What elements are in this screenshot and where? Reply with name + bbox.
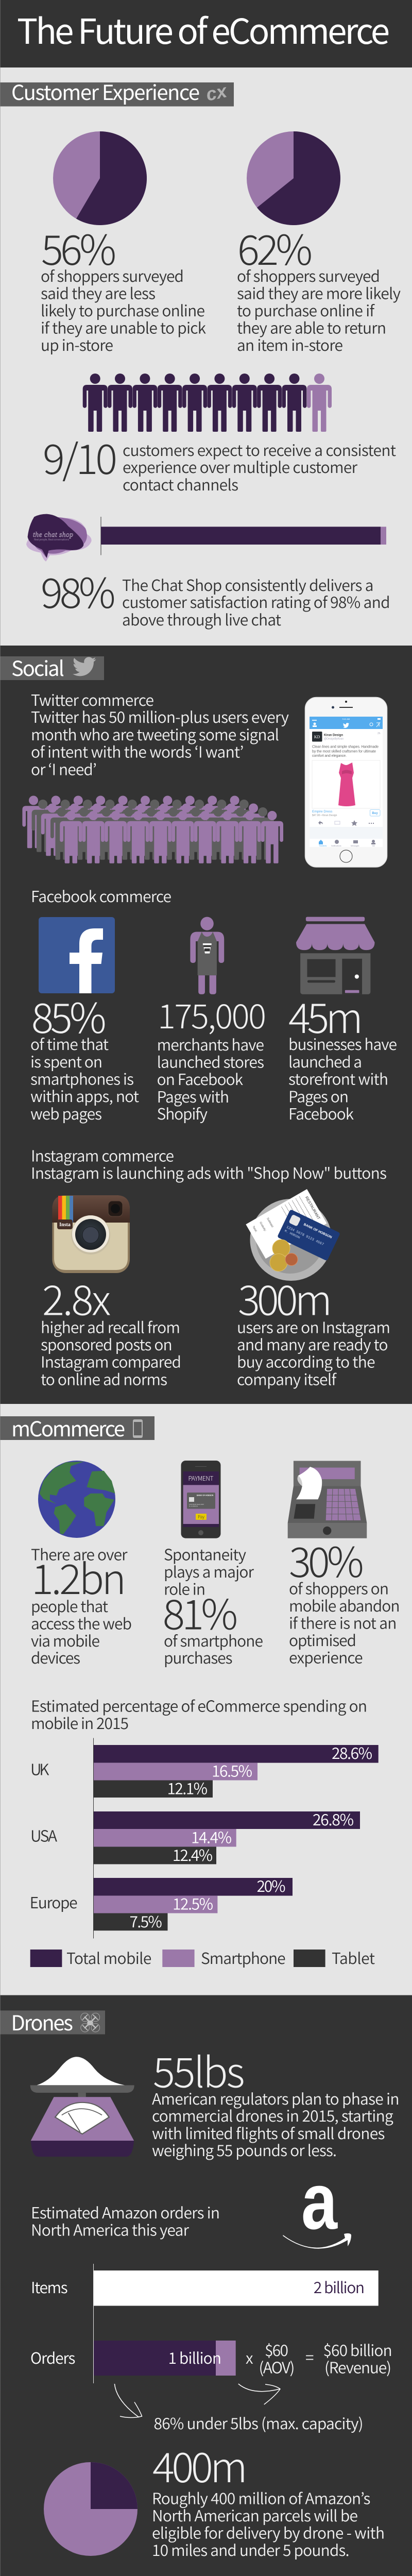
stat: 400m: North American parcels will be — [152, 2503, 358, 2526]
stat: 9/10: contact channels — [123, 472, 238, 495]
stat: 45m: 45m — [288, 986, 363, 1045]
text: twitter commerce: month who are tweeting some signal — [31, 722, 279, 745]
stat: 400m: 10 miles and under 5 pounds. — [152, 2538, 350, 2561]
stat: 400m — [152, 2435, 385, 2561]
text: twitter commerce: or ‘I need’ — [31, 757, 97, 780]
heading: customer experience: Customer Experience — [11, 76, 200, 106]
stat: 175,000 — [157, 990, 266, 1124]
heading: social — [0, 652, 104, 682]
chart group: USA — [30, 1807, 360, 1866]
pictogram: crowd of people — [22, 795, 283, 863]
icon: plate with bill, card and coins: Total: — [251, 1226, 258, 1233]
stat: 81% — [163, 1543, 263, 1668]
heading: drones: Drones — [11, 2007, 73, 2037]
stat: 62%: 62% — [237, 217, 313, 277]
text: instagram commerce: Instagram commerce — [31, 1144, 174, 1166]
icon: amazon logo — [283, 2157, 351, 2249]
logo: chat shop speech bubble: Real people, Real conversations — [34, 538, 70, 541]
stat: 30%: 30% — [289, 1530, 364, 1589]
stat: 55lbs: with limited flights of small drones — [152, 2121, 385, 2144]
stat: 9/10 — [43, 427, 396, 495]
stat: 175,000: launched stores — [157, 1050, 264, 1073]
heading: customer experience: cx — [204, 80, 230, 105]
title: The Future of eCommerce — [17, 4, 390, 54]
stat: 300m: 300m — [238, 1268, 332, 1328]
stat: 85%: of time that — [30, 1032, 109, 1055]
image: phone showing tweet: Buy — [372, 812, 378, 815]
stat: 1.2bn: There are over — [31, 1543, 128, 1565]
chart group: USA: 26.8% — [313, 1807, 354, 1830]
icon: plate with bill, card and coins: RESTAURANT — [304, 1195, 321, 1221]
stat: 9/10: experience over multiple customer — [123, 455, 358, 478]
stat: 85%: within apps, not — [30, 1084, 139, 1107]
stat: 56%: said they are less — [41, 281, 156, 304]
arrow: to 86% note — [114, 2384, 142, 2417]
stat: 30%: if there is not an — [289, 1611, 397, 1634]
image: phone showing tweet: Notifications — [331, 845, 341, 847]
stat: 56% — [41, 217, 206, 355]
stat: 56%: up in-store — [41, 333, 113, 355]
chart group: UK: UK — [30, 1757, 49, 1780]
chart group: UK — [30, 1741, 379, 1799]
icon: phone payment: Pay — [198, 1514, 204, 1520]
icon: plate with bill, card and coins: BANK OF HOBSON — [303, 1223, 333, 1240]
image: phone showing tweet: Clean lines and simple shapes. Handmade — [312, 745, 379, 749]
stat: 98%: customer satisfaction rating of 98% and — [122, 590, 390, 613]
bar chart: amazon items and orders: 1 billion — [168, 2346, 221, 2368]
stat: 2.8x: Instagram compared — [41, 1350, 181, 1372]
image: phone showing tweet: comfort and elegance. — [312, 754, 347, 758]
stat: 1.2bn — [31, 1543, 132, 1668]
text: instagram commerce: Instagram is launching ads with "Shop Now" buttons — [31, 1161, 387, 1183]
chart group: UK: 12.1% — [167, 1776, 208, 1799]
stat: 45m — [288, 986, 397, 1124]
heading: estimated amazon orders: Estimated Amazon orders in — [31, 2200, 220, 2223]
stat: 300m: and many are ready to — [237, 1332, 388, 1355]
text: twitter commerce — [31, 688, 289, 780]
chart group: Europe — [30, 1874, 293, 1932]
icon: phone payment: M. HOBSON — [189, 1505, 198, 1507]
stat: 1.2bn: access the web — [31, 1612, 132, 1634]
chart legend — [30, 1946, 375, 1969]
stat: 2.8x: higher ad recall from — [41, 1315, 180, 1338]
panel: mcommerce — [0, 1404, 412, 1995]
stat: 30% — [289, 1530, 400, 1668]
stat: 81%: Spontaneity — [164, 1543, 246, 1565]
heading: chart title: Estimated percentage of eCommerce spending on — [31, 1693, 367, 1716]
stat: 62%: they are able to return — [237, 315, 386, 338]
logo: chat shop speech bubble — [26, 514, 92, 562]
chart group: USA: 14.4% — [191, 1825, 232, 1848]
stat: 400m: 400m — [152, 2435, 248, 2495]
equation: revenue: x — [246, 2346, 253, 2368]
stat: 30%: optimised — [289, 1628, 356, 1651]
stat: 81%: 81% — [163, 1582, 238, 1641]
stat: 9/10: customers expect to receive a consistent — [123, 438, 396, 461]
heading: mcommerce: mCommerce — [11, 1413, 125, 1443]
stat: 1.2bn: 1.2bn — [31, 1547, 126, 1606]
stat: 2.8x: sponsored posts on — [41, 1332, 173, 1355]
stat: 30%: experience — [289, 1646, 363, 1668]
chart group: Europe: 7.5% — [130, 1909, 162, 1932]
icon: phone payment: 1234 5678 9123 4567 — [189, 1503, 204, 1505]
stat: 55lbs: commercial drones in 2015, starting — [152, 2104, 393, 2126]
stat: 56%: if they are unable to pick — [41, 315, 206, 338]
stat: 175,000: merchants have — [157, 1032, 264, 1055]
heading: estimated amazon orders: North America this year — [31, 2218, 190, 2241]
heading: estimated amazon orders — [31, 2200, 220, 2241]
arrow: to revenue equation — [238, 2384, 280, 2404]
image: phone showing tweet: KD — [314, 735, 320, 739]
stat: 81%: of smartphone — [164, 1629, 263, 1651]
icon: weighing scale — [30, 2057, 134, 2157]
image: phone showing tweet: Kiran Design — [324, 734, 343, 737]
bar chart: mobile spending by region — [30, 1738, 379, 1938]
text: instagram commerce — [31, 1144, 387, 1183]
icon: phone payment: PAYMENT — [188, 1474, 213, 1483]
stat: 56%: of shoppers surveyed — [41, 264, 184, 286]
heading: chart title — [31, 1693, 367, 1734]
stat: 56%: 56% — [41, 217, 116, 277]
stat: 98%: 98% — [41, 561, 115, 620]
chart legend: Tablet — [332, 1946, 375, 1969]
chart group: USA: USA — [30, 1824, 57, 1846]
text: twitter commerce: Twitter has 50 million-plus users every — [31, 705, 289, 727]
stat: 81%: purchases — [164, 1646, 233, 1668]
pie chart: 400m — [44, 2462, 138, 2556]
image: phone showing tweet: 9:41 AM — [342, 718, 350, 720]
stat: 30%: of shoppers on — [289, 1577, 389, 1599]
stat: 98% — [41, 561, 390, 630]
stat: 45m: storefront with — [288, 1067, 388, 1090]
heading: facebook commerce: Facebook commerce — [31, 884, 171, 907]
icon: plate with bill, card and coins: 1234 5678 9123 4567 — [285, 1225, 324, 1247]
stat: 62%: said they are more likely — [237, 281, 401, 304]
icon: plate with bill, card and coins — [246, 1189, 340, 1281]
stat: 81%: role in — [164, 1577, 205, 1599]
stat: 85%: smartphones is — [30, 1067, 134, 1090]
stat: 85%: is spent on — [30, 1049, 102, 1072]
stat: 98%: above through live chat — [122, 607, 281, 630]
icon: globe — [38, 1461, 115, 1538]
icon: instagram logo: Insta — [59, 1222, 71, 1228]
stat: 55lbs — [152, 2040, 400, 2161]
stat: 175,000: Shopify — [157, 1101, 208, 1124]
icon: plate with bill, card and coins: Gratuity: — [259, 1222, 267, 1232]
chart legend: Smartphone — [201, 1946, 286, 1969]
stat: 400m: Roughly 400 million of Amazon’s — [152, 2486, 370, 2509]
image: phone showing tweet: by the most skilled craftsmen for ultimate — [312, 750, 376, 753]
equation: revenue: (Revenue) — [324, 2355, 391, 2378]
equation: revenue: $60 billion — [323, 2338, 392, 2361]
stat: 2.8x: 2.8x — [42, 1268, 111, 1328]
icon: plate with bill, card and coins: M. HOBSON — [284, 1229, 301, 1240]
stat: 400m: eligible for delivery by drone - with — [152, 2520, 385, 2543]
stat: 81%: plays a major — [164, 1560, 254, 1582]
icon: instagram logo — [53, 1195, 130, 1273]
image: phone showing tweet: 2h — [377, 732, 381, 735]
heading: chart title: mobile in 2015 — [31, 1711, 129, 1734]
icon: amazon logo: a — [301, 2157, 338, 2246]
panel: header — [0, 0, 412, 67]
bar chart: 98% satisfaction — [101, 517, 386, 555]
text: twitter commerce: of intent with the words ‘I want’ — [31, 740, 244, 762]
stat: 98%: The Chat Shop consistently delivers a — [122, 573, 374, 596]
stat: 45m: Facebook — [288, 1101, 354, 1124]
chart group: Europe: Europe — [30, 1890, 78, 1913]
chart group: Europe: 20% — [256, 1874, 285, 1896]
stat: 1.2bn: devices — [31, 1646, 80, 1668]
icon: phone payment: BANK OF HOBSON — [197, 1494, 214, 1496]
stat: 62%: an item in-store — [237, 333, 343, 355]
icon: plate with bill, card and coins: Subtotal: — [266, 1217, 274, 1229]
icon: storefront — [296, 917, 375, 994]
pictogram: 9 of 10 people — [83, 374, 332, 432]
chart group: Europe: 12.5% — [173, 1892, 213, 1914]
stat: 1.2bn: people that — [31, 1594, 108, 1617]
chart legend: Total mobile — [66, 1946, 151, 1969]
equation: revenue: $60 — [265, 2338, 288, 2361]
icon: cash register — [288, 1461, 367, 1538]
heading: social: Social — [11, 652, 64, 682]
chart group: UK: 16.5% — [212, 1759, 252, 1782]
stat: 175,000: on Facebook — [157, 1067, 243, 1090]
stat: 300m: company itself — [237, 1367, 337, 1390]
image: phone showing tweet: Me — [372, 845, 375, 847]
stat: 1.2bn: via mobile — [31, 1629, 100, 1651]
stat: 175,000: Pages with — [157, 1084, 229, 1107]
text: 86% note: 86% under 5lbs (max. capacity) — [153, 2411, 364, 2434]
stat: 85%: web pages — [30, 1101, 102, 1124]
image: phone showing tweet — [305, 698, 387, 867]
panel: drones — [0, 1995, 412, 2576]
panel: customer experience — [0, 67, 412, 646]
equation: revenue — [246, 2338, 392, 2378]
icon: barista merchant — [190, 917, 224, 994]
stat: 45m: Pages on — [288, 1084, 349, 1107]
stat: 45m: businesses have — [288, 1032, 397, 1055]
stat: 175,000: 175,000 — [158, 990, 266, 1038]
heading: drones — [0, 2007, 105, 2037]
stat: 62%: of shoppers surveyed — [237, 264, 380, 286]
image: phone showing tweet: Messages — [351, 845, 359, 847]
stat: 300m: users are on Instagram — [237, 1315, 390, 1338]
image: phone showing tweet: Empire Dress — [312, 810, 333, 814]
logo: chat shop speech bubble: the chat shop — [33, 531, 73, 538]
stat: 55lbs: weighing 55 pounds or less. — [152, 2138, 337, 2161]
bar chart: amazon items and orders: Items — [31, 2275, 68, 2298]
stat: 30%: mobile abandon — [289, 1594, 400, 1616]
bar chart: amazon items and orders: 2 billion — [314, 2275, 365, 2298]
stat: 62%: to purchase online if — [237, 298, 375, 321]
image: phone showing tweet: $47.00 • Kiran Design — [312, 814, 337, 817]
bar chart: amazon items and orders: Orders — [30, 2346, 75, 2368]
stat: 45m: launched a — [288, 1049, 362, 1072]
chart group: USA: 12.4% — [173, 1843, 213, 1866]
image: phone showing tweet: Timelines — [319, 845, 327, 847]
stat: 85%: 85% — [31, 986, 107, 1045]
chart group: UK: 28.6% — [332, 1741, 372, 1764]
stat: 85% — [30, 986, 139, 1124]
equation: revenue: = — [305, 2345, 314, 2368]
stat: 2.8x — [41, 1268, 181, 1390]
bar chart: amazon items and orders — [30, 2264, 379, 2383]
equation: revenue: (AOV) — [259, 2355, 295, 2378]
panel: social — [0, 646, 412, 1404]
icon: facebook logo — [39, 917, 115, 993]
stat: 9/10: 9/10 — [43, 427, 117, 486]
image: phone showing tweet: @DesignByKiran — [324, 738, 344, 741]
pie chart: 56% — [53, 131, 147, 225]
icon: phone payment — [181, 1461, 220, 1538]
text: twitter commerce: Twitter commerce — [31, 688, 154, 710]
pie chart: 62% — [247, 131, 340, 225]
stat: 55lbs: 55lbs — [153, 2040, 245, 2099]
stat: 300m — [237, 1268, 390, 1390]
stat: 300m: buy according to the — [237, 1350, 375, 1372]
stat: 56%: likely to purchase online — [41, 298, 205, 321]
stat: 62% — [237, 217, 401, 355]
stat: 55lbs: American regulators plan to phase in — [152, 2087, 400, 2109]
stat: 2.8x: to online ad norms — [41, 1367, 167, 1390]
